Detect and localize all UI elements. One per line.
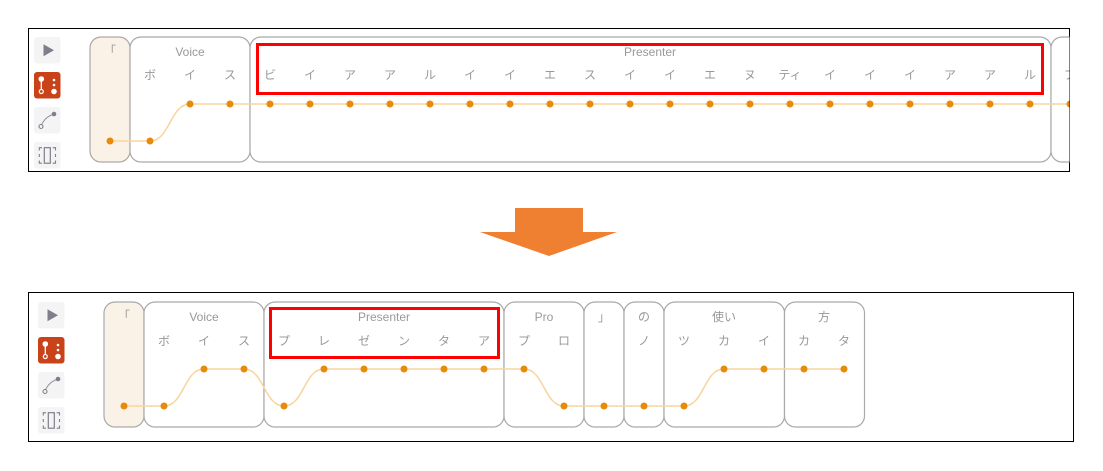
toolbar: before xyxy=(34,37,60,168)
tile: Presenter: イ xyxy=(504,68,516,82)
tile: Presenter: ア xyxy=(984,68,996,82)
tile: Presenter: Presenter xyxy=(624,45,676,59)
tile: Pro xyxy=(504,302,584,427)
tile: Voice: イ xyxy=(184,68,196,82)
highlight box: before xyxy=(258,44,1042,94)
tile: Presenter: Presenter xyxy=(358,310,410,324)
tile: Voice: Voice xyxy=(189,310,219,324)
pitch line: before xyxy=(110,104,1070,141)
tile: 使い: ツ xyxy=(678,334,690,348)
pitch dots: before xyxy=(106,100,1074,144)
icon: play xyxy=(34,37,60,64)
tile: Pro: ロ xyxy=(558,334,570,348)
tile: Pro: Pro xyxy=(535,310,554,324)
tile: Presenter: ア xyxy=(944,68,956,82)
tile: Presenter: イ xyxy=(664,68,676,82)
tile: Presenter xyxy=(250,37,1051,162)
tile: opening bracket xyxy=(104,302,144,427)
tile: opening bracket: 「 xyxy=(118,309,130,323)
tile: 方: カ xyxy=(798,334,810,348)
tile: Presenter: イ xyxy=(864,68,876,82)
tile: Voice: ス xyxy=(224,68,236,82)
panel: after editing xyxy=(28,292,1074,442)
tile: Voice: Voice xyxy=(175,45,205,59)
tile: Voice: ス xyxy=(238,334,250,348)
tile: Voice: ボ xyxy=(158,334,170,348)
tile: Presenter: ア xyxy=(344,68,356,82)
tile: 使い: カ xyxy=(718,334,730,348)
tile: opening bracket: 「 xyxy=(104,44,116,58)
tile: Presenter xyxy=(264,302,504,427)
tile: Voice: ボ xyxy=(144,68,156,82)
tile: Voice xyxy=(130,37,250,162)
icon: node mode active xyxy=(34,72,60,98)
phoneme track: after xyxy=(104,302,864,427)
icon: curve xyxy=(38,372,64,398)
tile: Presenter: イ xyxy=(624,68,636,82)
tile: Voice: イ xyxy=(198,334,210,348)
tile: 使い: 使い xyxy=(712,309,736,324)
tile: Presenter: ル xyxy=(424,68,436,82)
tile: 使い: イ xyxy=(758,334,770,348)
tile: 方: タ xyxy=(838,334,850,348)
tile: Presenter: イ xyxy=(464,68,476,82)
tile: Presenter: エ xyxy=(704,68,716,82)
tile: Presenter: イ xyxy=(904,68,916,82)
tile: Presenter: ビ xyxy=(264,68,276,82)
tile: Presenter: ヌ xyxy=(744,68,756,82)
arrow: down xyxy=(480,208,617,256)
tile: の: ノ xyxy=(638,334,650,348)
phoneme track: before xyxy=(90,37,1103,162)
tile: 使い xyxy=(664,302,784,427)
tile: 方: 方 xyxy=(818,309,830,324)
highlight box: after xyxy=(270,308,498,358)
icon: selection range xyxy=(38,407,64,434)
tile: closing bracket xyxy=(584,302,624,427)
tile: の: の xyxy=(638,310,650,324)
icon: play xyxy=(38,302,64,328)
pitch dots: after xyxy=(120,366,848,410)
tile: Presenter: エ xyxy=(544,68,556,82)
tile: Presenter: ン xyxy=(398,334,410,348)
tile: Presenter: レ xyxy=(318,334,330,348)
tile: Voice xyxy=(144,302,264,427)
pitch line: after xyxy=(124,369,844,406)
tile: Presenter: プ xyxy=(278,334,290,348)
tile: Presenter: イ xyxy=(304,68,316,82)
icon: curve xyxy=(34,107,60,134)
tile: Presenter: ア xyxy=(384,68,396,82)
tile: next word, cut off: プ xyxy=(1064,68,1076,82)
tile: opening bracket xyxy=(90,37,130,162)
tile: Presenter: ア xyxy=(478,334,490,348)
icon: node mode active xyxy=(38,337,64,364)
panel: before editing xyxy=(28,28,1103,172)
toolbar: after xyxy=(38,302,64,434)
tile: Presenter: ティ xyxy=(778,68,802,82)
tile: Pro: プ xyxy=(518,334,530,348)
tile: Presenter: ル xyxy=(1024,68,1036,82)
tile: next word, cut off xyxy=(1050,36,1070,163)
tile: closing bracket: 」 xyxy=(598,310,610,324)
tile: Presenter: イ xyxy=(824,68,836,82)
tile: Presenter: ゼ xyxy=(358,334,370,348)
icon: selection range xyxy=(34,142,60,168)
tile: Presenter: ス xyxy=(584,68,596,82)
tile: の xyxy=(624,302,664,427)
tile: 方 xyxy=(784,302,864,427)
tile: Presenter: タ xyxy=(438,334,450,348)
